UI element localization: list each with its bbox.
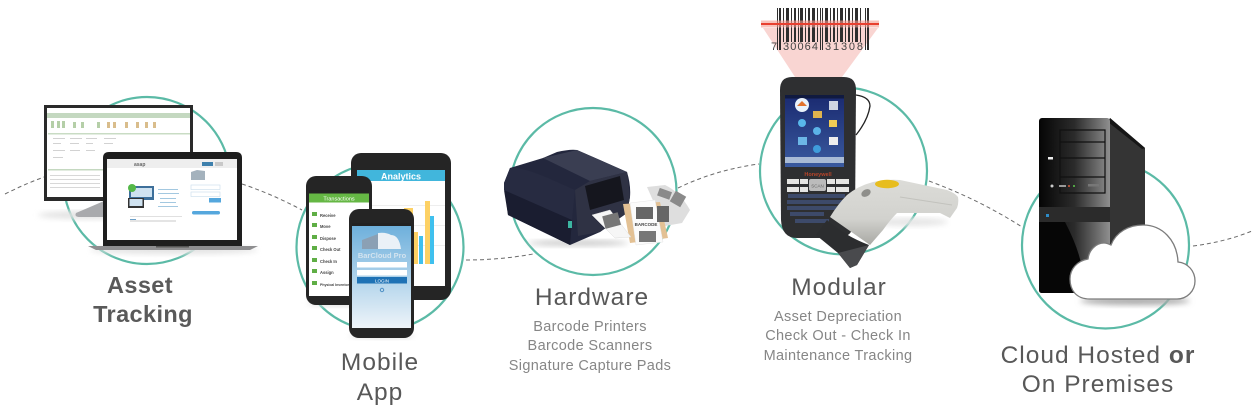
- panel: cloud or on premises: [1001, 118, 1195, 398]
- icon: barcode labels: [592, 185, 690, 245]
- icon: barcode: 30064: [783, 41, 818, 53]
- list: hardware items: Signature Capture Pads: [509, 358, 671, 374]
- panel: hardware: [504, 108, 690, 374]
- icon: transactions phone: Physical Inventory: [320, 283, 351, 287]
- icon: analytics tablet: [351, 153, 451, 300]
- icon: handheld computer: [780, 77, 870, 238]
- scan beam: [763, 28, 878, 77]
- icon: cloud: [1070, 225, 1195, 305]
- heading: asset tracking: Tracking: [93, 301, 193, 327]
- teal circle: asset tracking: [64, 97, 230, 264]
- icon: transactions phone: Assign: [320, 270, 334, 275]
- icon: barcode: 7: [771, 41, 777, 53]
- heading: hardware: Hardware: [535, 284, 649, 311]
- heading: cloud hosted or on premises: On Premises: [1022, 371, 1174, 398]
- list: modular items: Check Out - Check In: [765, 328, 911, 344]
- icon: login phone: BarCloud Pro: [358, 251, 407, 260]
- heading: asset tracking: Asset: [107, 272, 173, 298]
- teal circle: cloud: [1022, 162, 1189, 328]
- icon: transactions phone: Transactions: [323, 196, 355, 202]
- icon: transactions phone: Check In: [320, 259, 338, 264]
- icon: login phone: [349, 209, 415, 338]
- teal circle: hardware: [510, 108, 676, 275]
- heading: mobile app: Mobile: [341, 349, 419, 376]
- heading: cloud hosted or on premises: Cloud Hosted or: [1001, 342, 1195, 369]
- list: hardware items: Barcode Printers: [533, 319, 647, 335]
- icon: desktop monitor: [38, 105, 193, 219]
- icon: tower server: [1039, 118, 1145, 293]
- icon: handheld barcode scanner gun: [816, 180, 958, 268]
- icon: label printer: [504, 150, 630, 246]
- icon: transactions phone: Move: [320, 224, 331, 229]
- icon: barcode: 31308: [825, 41, 863, 53]
- icon: barcode: [771, 8, 869, 53]
- icon: transactions phone: [306, 176, 373, 306]
- icon: handheld computer: Honeywell: [804, 172, 832, 178]
- list: modular items: Maintenance Tracking: [764, 348, 912, 364]
- teal circle: mobile app: [296, 164, 464, 330]
- heading: modular: Modular: [791, 274, 887, 301]
- list: hardware items: Barcode Scanners: [528, 338, 652, 354]
- icon: barcode labels: BARCODE: [635, 222, 657, 227]
- icon: transactions phone: Dispose: [320, 236, 337, 241]
- teal circle: modular: [760, 88, 927, 254]
- dashed connector lines: [5, 164, 1252, 260]
- icon: laptop: asap: [134, 162, 145, 168]
- icon: transactions phone: Check Out: [320, 247, 341, 252]
- icon: laptop: [88, 152, 258, 254]
- icon: login phone: LOGIN: [375, 278, 389, 284]
- icon: analytics tablet: Analytics: [381, 172, 421, 182]
- panel: modular: [760, 8, 958, 364]
- icon: transactions phone: Receive: [320, 213, 336, 218]
- panel: asset tracking: [38, 97, 258, 327]
- icon: handheld computer: SCAN: [811, 184, 824, 188]
- red laser line: [761, 20, 879, 28]
- panel: mobile app: [296, 153, 464, 406]
- heading: mobile app: App: [357, 379, 403, 406]
- list: modular items: Asset Depreciation: [774, 309, 902, 325]
